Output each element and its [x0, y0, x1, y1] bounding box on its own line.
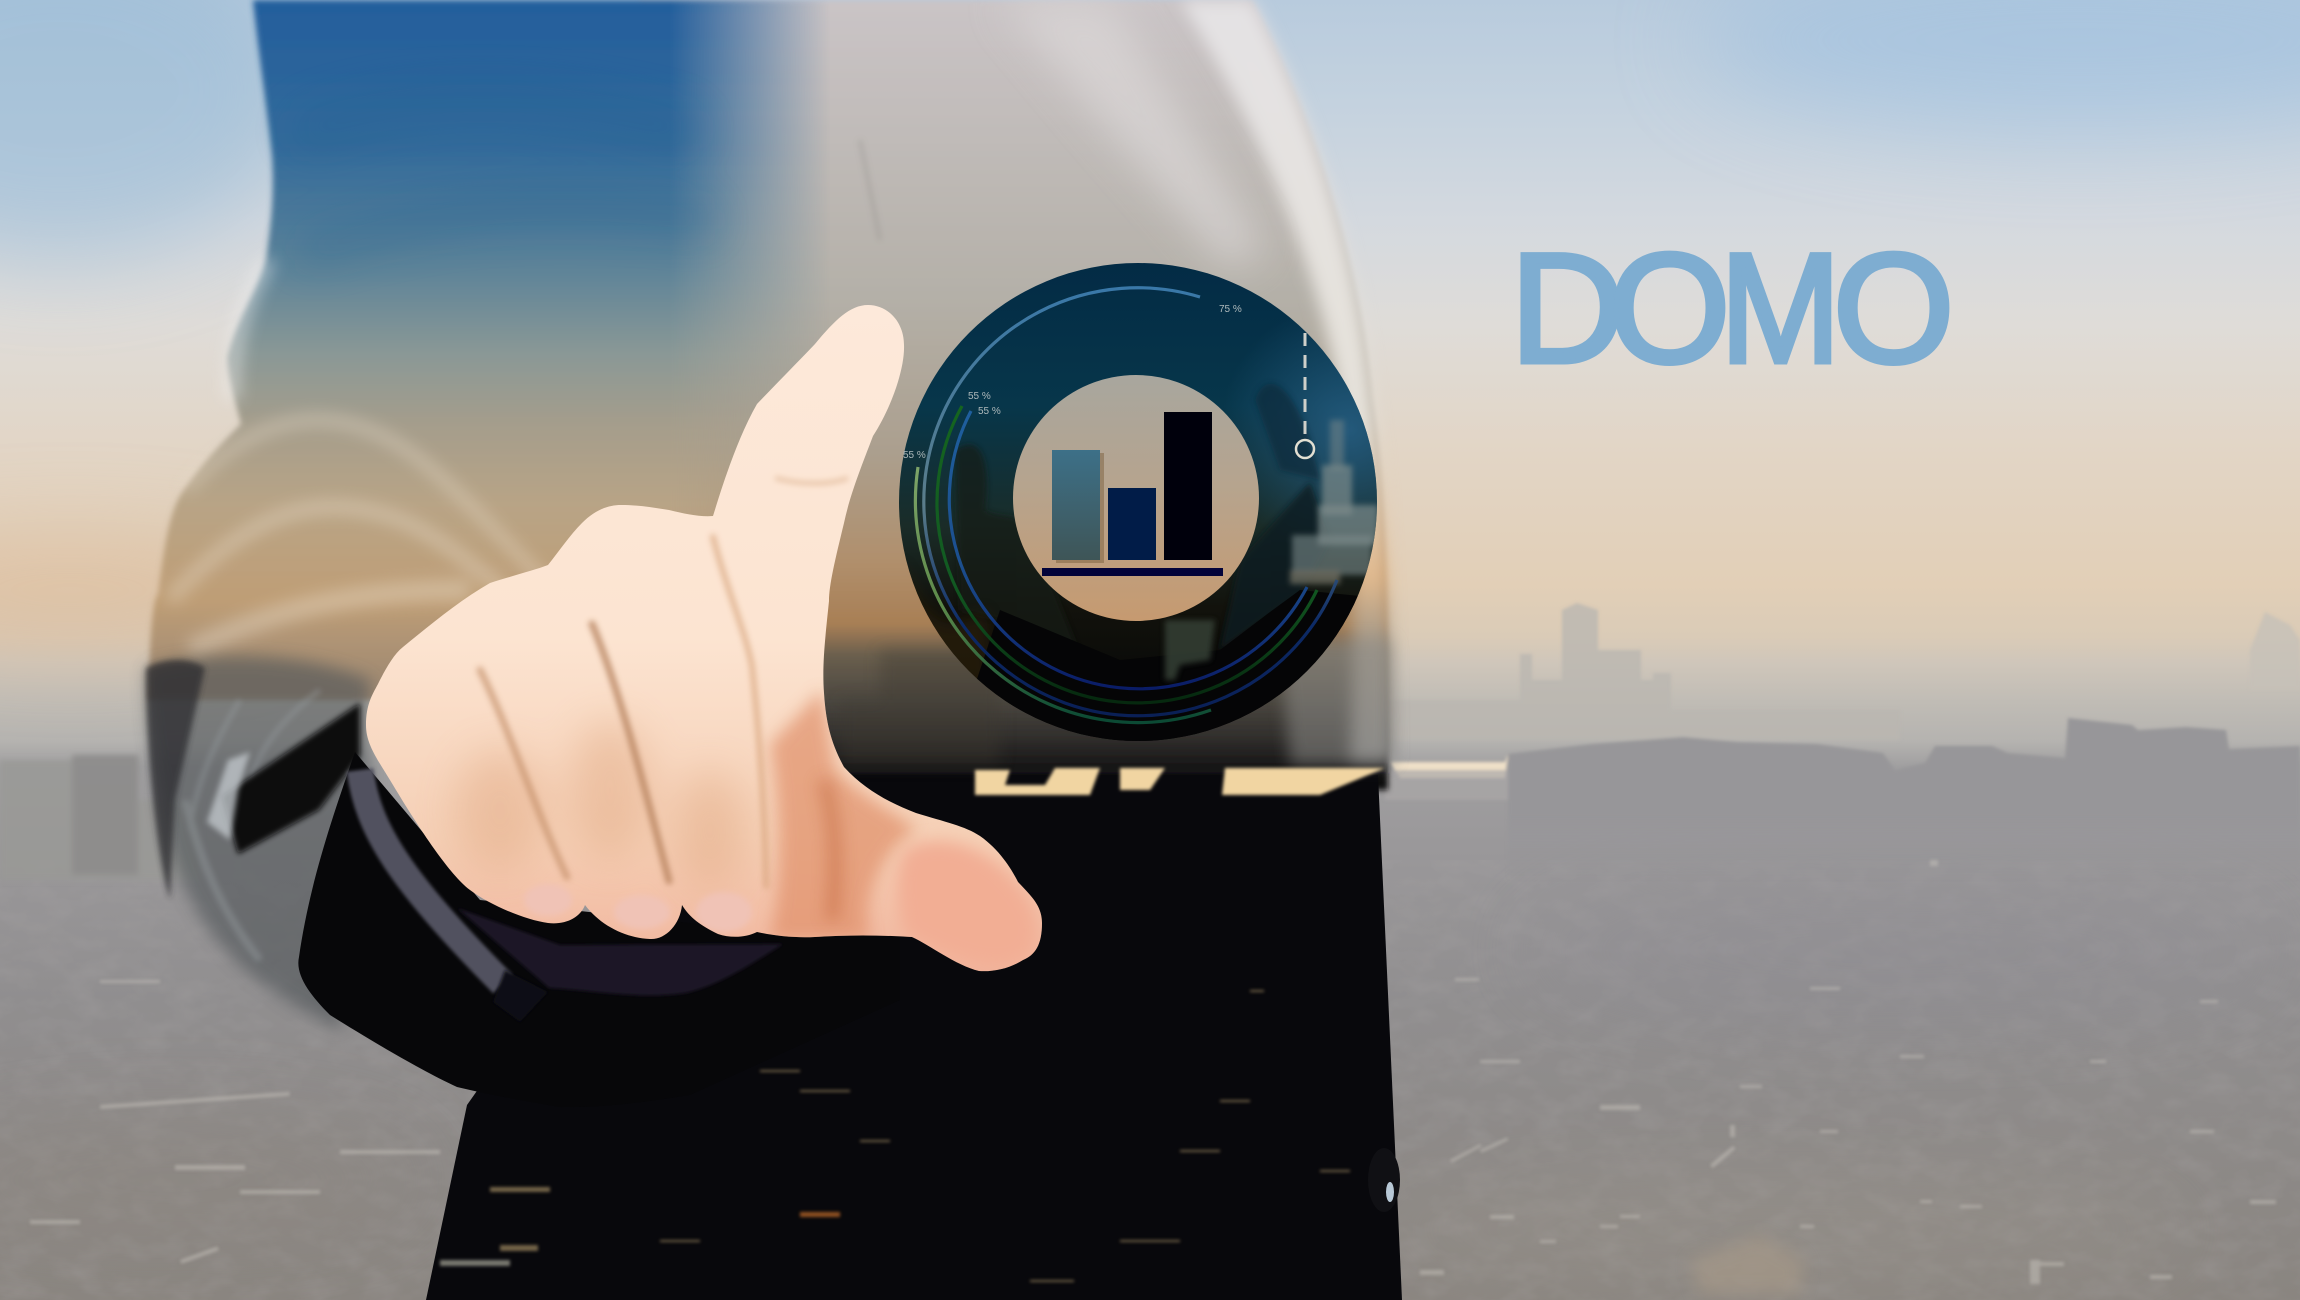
DOMO logo: O [1833, 222, 1954, 396]
suit city lights [440, 990, 1350, 1282]
badge disc [899, 263, 1377, 741]
dark cuff block [222, 703, 360, 854]
DOMO logo [1510, 221, 1954, 396]
pointing hand [366, 305, 1042, 971]
sleeve folds [170, 420, 565, 650]
distant skyline right [1385, 603, 2300, 880]
metal watch detail [207, 752, 250, 840]
blue shirt and sleeve [148, 0, 840, 700]
ring labels: 55 % [978, 406, 1001, 417]
lower dark suit [426, 775, 1402, 1300]
city lights [30, 860, 2276, 1284]
grey cuff band [360, 770, 503, 984]
ring labels [903, 304, 1242, 461]
disc scenery [899, 300, 1400, 760]
hand shape [366, 305, 1042, 971]
palm red shading [770, 690, 916, 940]
data visualisation badge [899, 263, 1400, 760]
main sleeve [298, 752, 900, 1107]
pale ground patch [1690, 1235, 1805, 1295]
knuckle tan shading [455, 720, 745, 890]
mid torso fog [1280, 640, 1392, 765]
distant skyline left [0, 755, 200, 880]
translucent outer sleeve [146, 656, 370, 1030]
thumb crease [824, 780, 835, 920]
finger separators [480, 537, 766, 886]
suit button [1368, 1148, 1400, 1212]
sleeve streaks [185, 690, 320, 960]
thumb [898, 841, 1037, 967]
dark sleeve left block [146, 660, 205, 900]
ring labels: 55 % [903, 450, 926, 461]
dashed pointer [1304, 333, 1306, 438]
buildings behind hand [840, 650, 1000, 765]
ground texture [0, 860, 2300, 1300]
river reflection [975, 768, 1385, 795]
businessman [146, 0, 1402, 1300]
bar chart icon [1042, 412, 1223, 576]
pointer dot [1296, 440, 1314, 458]
DOMO logo: D [1510, 221, 1625, 396]
ring labels: 75 % [1219, 304, 1242, 315]
inner cuff lining [457, 908, 783, 995]
jacket lapel highlight [1000, 0, 1265, 270]
fingernails [524, 884, 752, 932]
hand shading [455, 478, 1037, 967]
jacket pocket shading [860, 140, 880, 240]
DOMO logo: O [1609, 222, 1730, 396]
DOMO logo: M [1720, 221, 1841, 395]
progress rings [915, 288, 1337, 723]
jacket upper torso [640, 0, 1388, 790]
jacket right edge highlight [1180, 0, 1392, 760]
sleeve left glow [232, 260, 268, 400]
shirt band shading [310, 104, 700, 250]
cuff band end [493, 970, 548, 1022]
ring labels: 55 % [968, 391, 991, 402]
inner circle [1013, 375, 1259, 621]
index joint crease [775, 478, 848, 483]
